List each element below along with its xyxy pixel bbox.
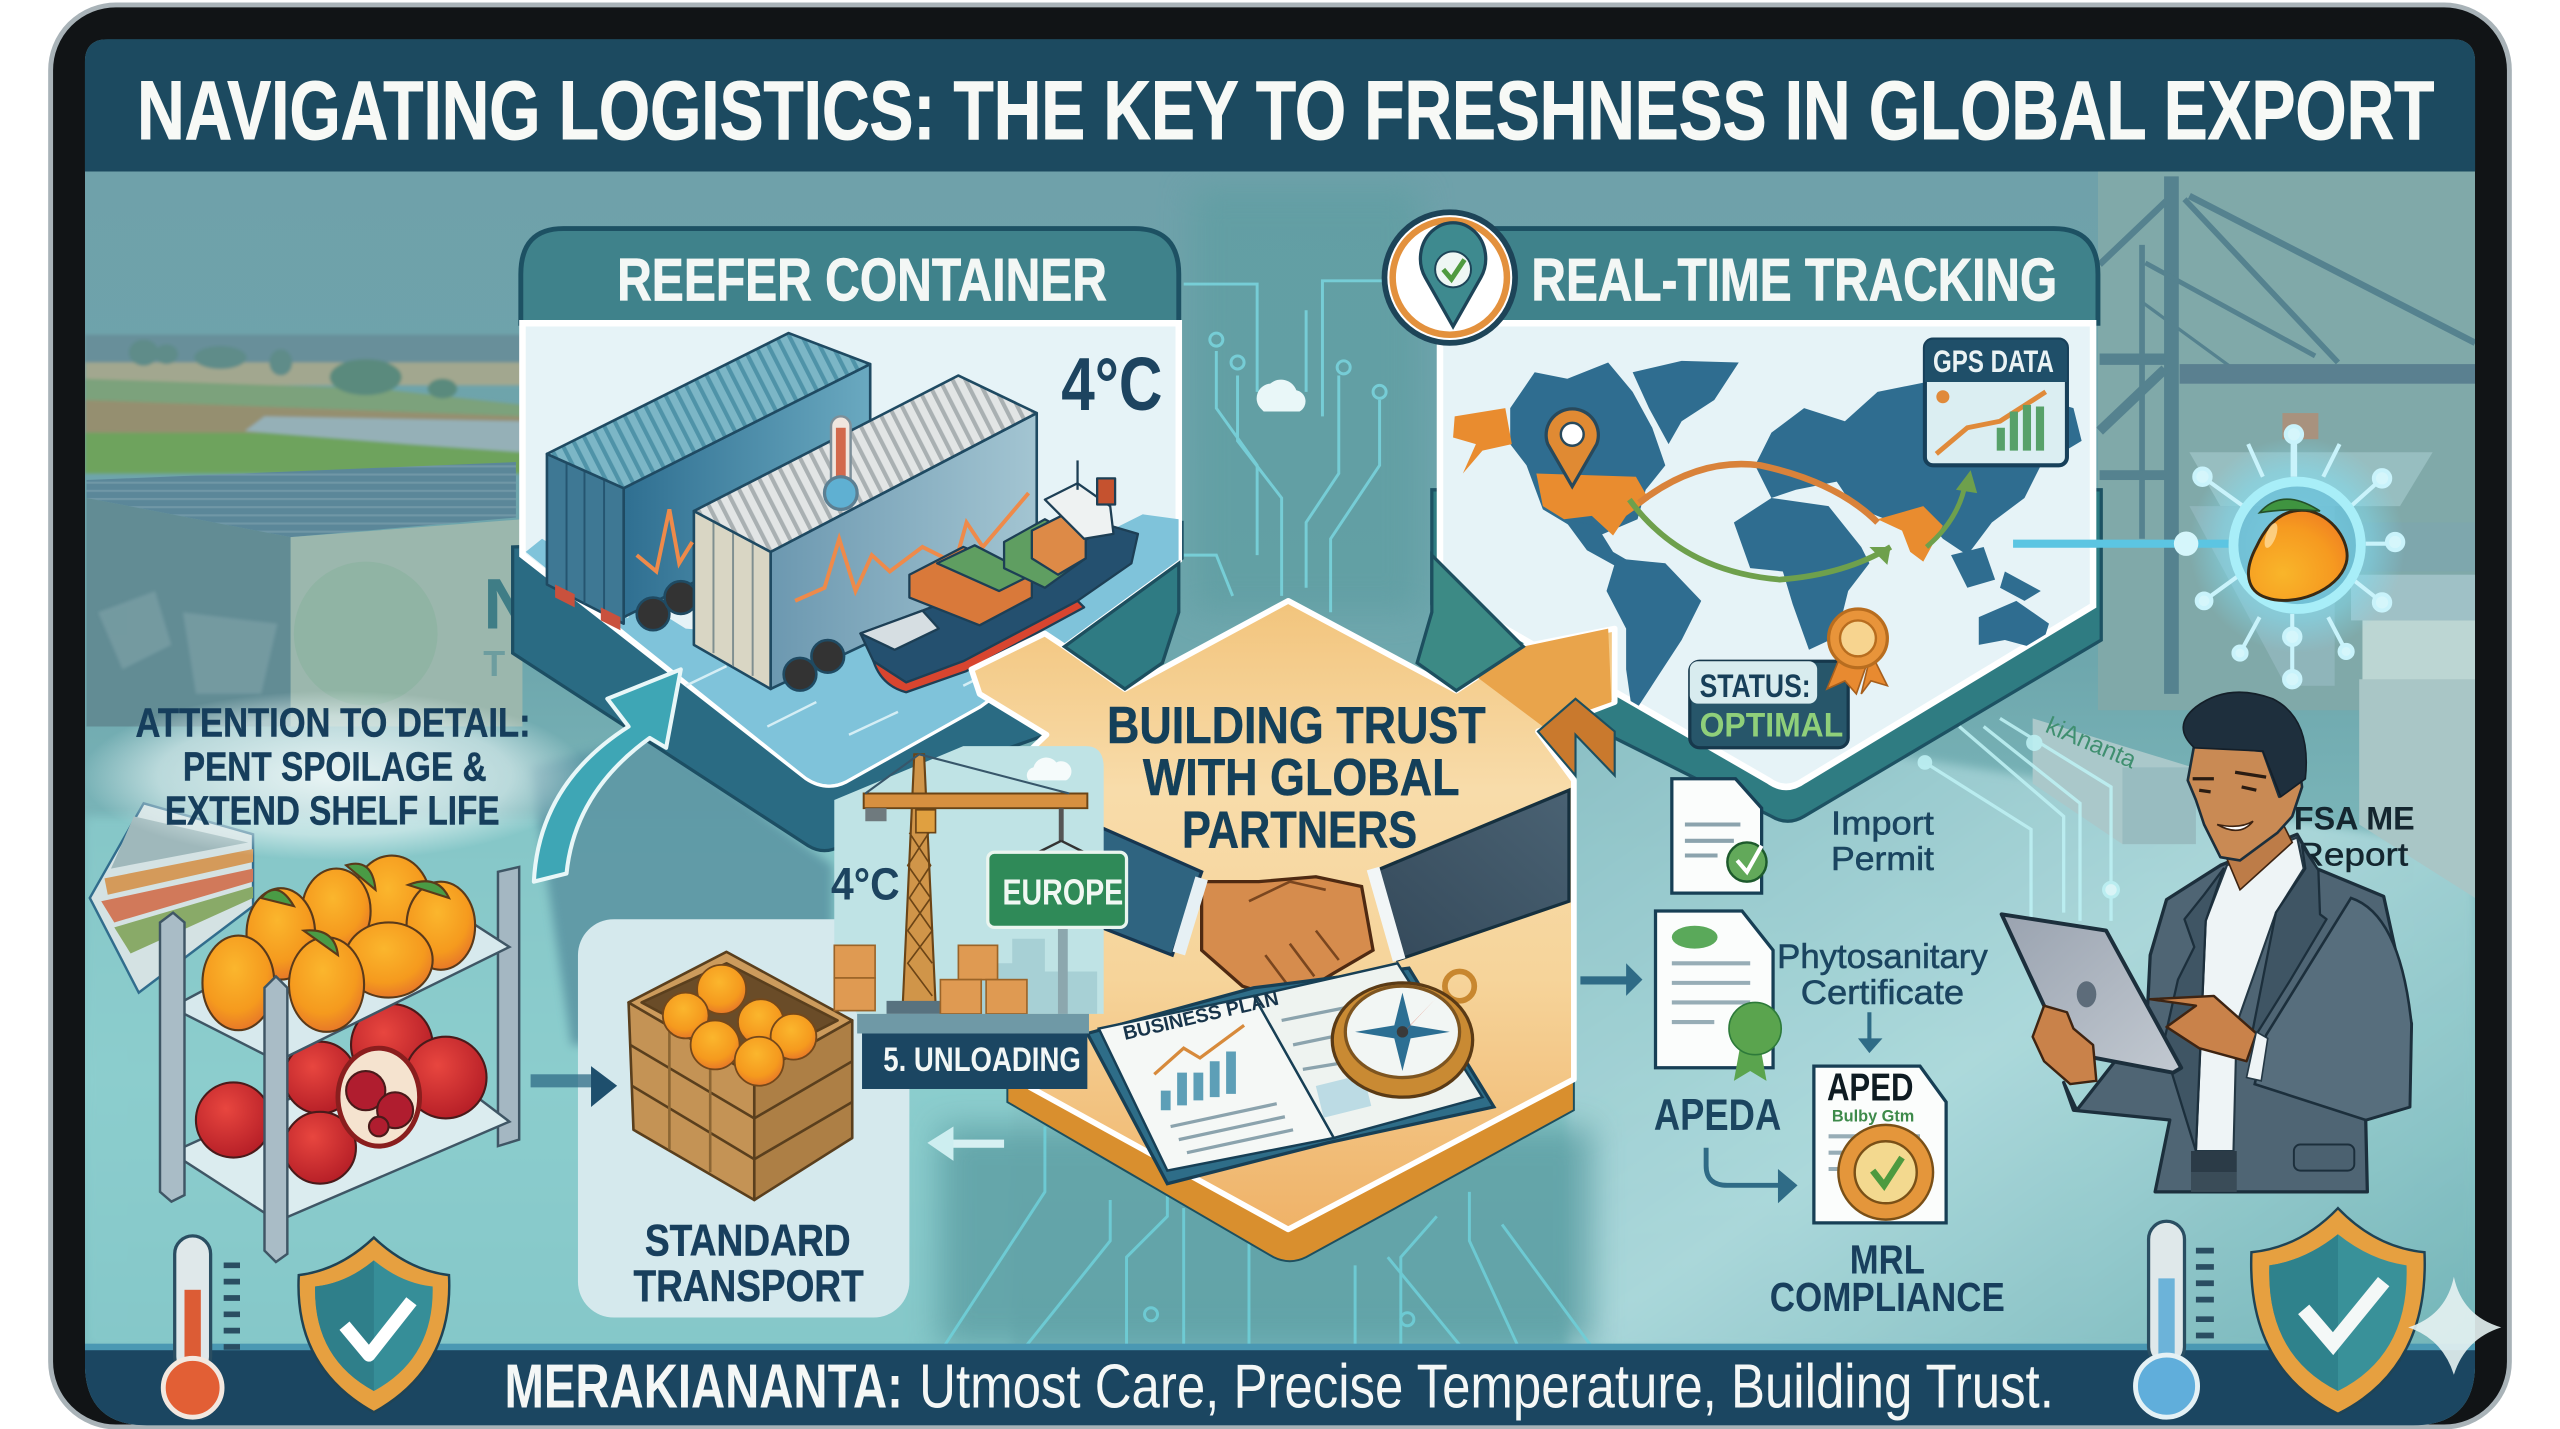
- flow arrow: rack to crate: [531, 1066, 617, 1107]
- city silhouette: [963, 939, 1097, 1014]
- jacket: [2064, 834, 2411, 1192]
- blue container: [547, 333, 870, 630]
- hexagon body: [971, 601, 1615, 1229]
- right sleeve: [1373, 790, 1569, 960]
- Europe card background: [834, 746, 1104, 1014]
- Europe unloading card: [831, 746, 1127, 1089]
- rack with fruit: [160, 856, 519, 1262]
- reefer temperature: 4°C: [1061, 342, 1162, 426]
- brow and eyes: [2193, 772, 2266, 792]
- title bar: [85, 39, 2475, 171]
- tracking header and body: [1433, 229, 2098, 787]
- right teal tab: [1417, 555, 1523, 691]
- MRL compliance label: [1770, 1236, 2005, 1320]
- tablet: [2002, 914, 2181, 1073]
- footer text: MERAKIANANTA:: [504, 1352, 903, 1421]
- back post: [498, 867, 519, 1146]
- business plan book: [1087, 963, 1494, 1184]
- shirt: [2196, 838, 2304, 1151]
- boxes: [834, 945, 1027, 1014]
- import permit label: [1831, 805, 1935, 878]
- attention to detail callout: ATTENTION TO DETAIL:: [136, 699, 531, 745]
- reefer panel depth shape: [513, 522, 1182, 851]
- crate: [629, 952, 852, 1200]
- hexagon rim: [1007, 1045, 1574, 1261]
- flow arrow: hexagon to documents: [1580, 963, 1642, 996]
- trust heading: PARTNERS: [1182, 801, 1417, 859]
- sign post: [1060, 927, 1066, 1014]
- background: lower right glow: [1567, 702, 2475, 1349]
- world map: [1453, 361, 2082, 715]
- bottom shelf: [171, 1045, 509, 1221]
- right arrow fold: [1538, 699, 1615, 776]
- APEDA label: APEDA: [1654, 1091, 1781, 1140]
- trust heading: WITH GLOBAL: [1143, 749, 1460, 807]
- map pin: [1546, 409, 1598, 487]
- status badge: STATUS:: [1700, 667, 1811, 704]
- unloading band: 5. UNLOADING: [883, 1041, 1081, 1079]
- standard transport label: [633, 1217, 864, 1311]
- handshake: [1179, 869, 1399, 1001]
- left hand: [2033, 1006, 2096, 1084]
- MRL document: Bulby Gtm: [1832, 1108, 1914, 1126]
- oranges in crate: [663, 965, 816, 1086]
- background: lower left panel tones: [85, 188, 1592, 1349]
- trust heading: [1107, 697, 1486, 859]
- top right arrow shade: [1478, 629, 1611, 727]
- status badge: [1690, 661, 1848, 748]
- GPS data card: [1925, 340, 2067, 465]
- MRL document: APED: [1827, 1066, 1913, 1109]
- icon: right shield: [2251, 1208, 2425, 1414]
- panel: real-time tracking: [1384, 212, 2101, 821]
- FSMA report label: FSA ME: [2294, 799, 2415, 836]
- hair: [2183, 692, 2306, 797]
- import permit label: Permit: [1831, 841, 1935, 878]
- belt: [2191, 1151, 2237, 1172]
- icon: hot thermometer: [163, 1236, 240, 1417]
- cargo ship: [860, 460, 1138, 692]
- ECG lines: [637, 493, 1029, 601]
- water ripples: [626, 616, 973, 736]
- return arrow: [927, 1127, 1004, 1161]
- background: port cranes, ship and containers: [2098, 171, 2475, 710]
- pomegranates: [196, 1004, 487, 1184]
- background: truck and containers behind presenter: [2033, 679, 2475, 898]
- GPS data card: GPS DATA: [1933, 344, 2054, 379]
- teal curved arrow: [534, 669, 681, 882]
- circuit lines: lower centre: [944, 1127, 1592, 1347]
- reefer heading: REEFER CONTAINER: [617, 245, 1107, 313]
- background: farm and warehouse: T: [483, 643, 505, 684]
- background: farm and warehouse: [85, 335, 535, 727]
- Europe sign: [988, 841, 1127, 927]
- footer band: [85, 1344, 2475, 1427]
- tracking heading: REAL-TIME TRACKING: [1531, 245, 2057, 313]
- MRL compliance label: COMPLIANCE: [1770, 1274, 2005, 1320]
- import permit document: [1672, 779, 1767, 893]
- icon: sparkle: [2408, 1277, 2501, 1375]
- attention to detail callout: PENT SPOILAGE &: [183, 743, 487, 789]
- front posts: [160, 913, 287, 1262]
- standard transport label: TRANSPORT: [633, 1262, 864, 1311]
- business plan book: BUSINESS PLAN: [1121, 988, 1281, 1045]
- circuit lines: upper centre: [1184, 281, 1388, 612]
- FSMA report label: Report: [2297, 835, 2408, 872]
- neck: [2227, 816, 2292, 890]
- import permit label: Import: [1831, 805, 1935, 842]
- trousers: [2191, 1172, 2237, 1192]
- background: farm and warehouse: N: [483, 565, 535, 645]
- card temperature: 4°C: [831, 859, 900, 910]
- cloud: [1027, 758, 1071, 780]
- FSMA report label: [2294, 799, 2415, 872]
- right hand: [2150, 996, 2256, 1061]
- panel: standard transport: [578, 919, 909, 1318]
- mango orb with network: [2013, 426, 2405, 687]
- lapels: [2163, 846, 2327, 1151]
- footer text: Utmost Care, Precise Temperature, Building Trust.: [919, 1352, 2054, 1421]
- phytosanitary label: Phytosanitary: [1777, 938, 1989, 976]
- arrow: APEDA to compliance: [1706, 1148, 1798, 1203]
- right sleeve: [2255, 898, 2411, 1120]
- icon: cold thermometer: [2136, 1221, 2214, 1417]
- icon: left shield: [298, 1238, 449, 1412]
- status badge: OPTIMAL: [1700, 706, 1843, 744]
- shirt cuff: [2247, 1032, 2268, 1081]
- Europe sign: EUROPE: [1002, 871, 1123, 912]
- arrow: certificate to compliance: [1858, 1012, 1882, 1053]
- icon: cloud: [1257, 380, 1306, 411]
- glowing beam: [2013, 541, 2229, 546]
- mango fruit: [2248, 499, 2347, 600]
- compass: [1332, 971, 1474, 1097]
- phytosanitary label: [1777, 938, 1989, 1012]
- man with tablet: [2002, 692, 2411, 1192]
- phytosanitary document: [1656, 911, 1781, 1081]
- left sleeve: [1076, 816, 1202, 955]
- attention to detail callout: [82, 691, 588, 860]
- reefer header and body: [521, 229, 1179, 785]
- white container: [694, 376, 1037, 691]
- smile: [2217, 821, 2253, 830]
- tablet logo: [2077, 981, 2096, 1007]
- background: truck and containers behind presenter: kiAnanta: [2042, 712, 2140, 774]
- jacket pocket: [2294, 1144, 2354, 1171]
- MRL compliance label: MRL: [1850, 1236, 1925, 1282]
- center hexagon with arrows: [971, 555, 1615, 1261]
- MRL document: [1814, 1066, 1946, 1223]
- mangoes: [202, 856, 475, 1032]
- phytosanitary label: Certificate: [1801, 974, 1964, 1012]
- unloading band: [857, 1014, 1089, 1089]
- panel: reefer container: [513, 229, 1182, 851]
- water: [526, 514, 1179, 785]
- tracking depth shape: [1432, 490, 2101, 821]
- location pin badge: [1384, 212, 1515, 343]
- crane: [864, 754, 1087, 1014]
- top shelf: [171, 882, 509, 1061]
- circuit lines: right: [1919, 718, 2118, 939]
- left teal tab: [1064, 563, 1179, 689]
- attention to detail callout: EXTEND SHELF LIFE: [165, 787, 500, 833]
- supermarket shelf image: [90, 803, 253, 993]
- trust heading: BUILDING TRUST: [1107, 697, 1486, 755]
- thermometer in container: [824, 416, 857, 509]
- standard transport label: STANDARD: [645, 1217, 851, 1266]
- medal: [1827, 609, 1887, 694]
- head: [2188, 744, 2302, 860]
